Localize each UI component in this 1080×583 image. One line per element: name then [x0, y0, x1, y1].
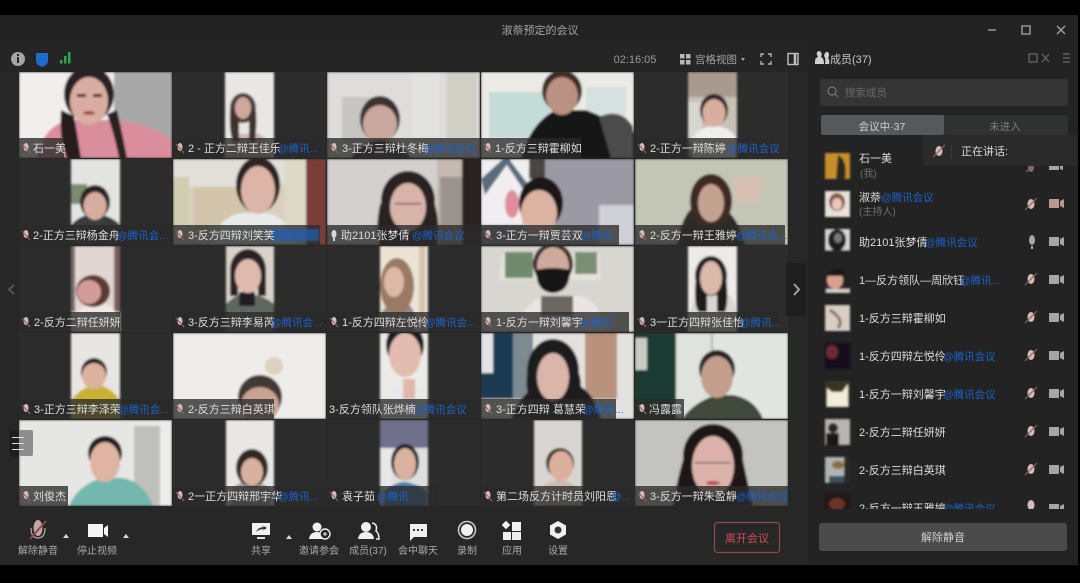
button: members — [349, 522, 387, 557]
button: settings — [548, 521, 568, 557]
video tile: 陈婷 — [638, 72, 780, 158]
video tile: 朱盈靜: @腾讯会议 — [736, 490, 789, 503]
button: unmute — [18, 520, 69, 557]
member row: 淑萘 — [825, 191, 1064, 218]
video tile: 李易芮: 3-反方三辩李易芮 — [188, 315, 275, 329]
icon: full screen — [761, 54, 771, 64]
video tile: 刘俊杰: 刘俊杰 — [33, 489, 66, 503]
video tile: 张佳怡: @腾讯... — [740, 316, 780, 329]
video tile: 袁子茹: 袁子茹 — [342, 489, 375, 503]
button: chat: 会中聊天 — [398, 544, 438, 557]
speaking now popup — [923, 135, 1078, 166]
button: settings: 设置 — [548, 545, 568, 557]
video tile: 王佳乐: @腾讯... — [278, 142, 318, 155]
button: chat — [398, 524, 438, 557]
video tile: 白英琪 — [173, 333, 326, 419]
members header — [815, 51, 1070, 66]
member row: 刘馨宇 — [825, 381, 1064, 407]
icon: info — [11, 52, 25, 66]
video tile: 杜冬梅: 3-正方三辩杜冬梅 — [342, 141, 429, 155]
video tile: 白英琪: 2-反方三辩白英琪 — [188, 402, 275, 416]
video tile: 冯露露: 冯露露 — [649, 403, 682, 416]
video tile: 朱盈靜 — [635, 420, 789, 506]
gallery view switch: 宫格视图 — [695, 53, 737, 66]
button: unmute: 解除静音 — [18, 544, 58, 557]
member row: 周欣钰 — [825, 267, 1064, 293]
unmute button — [819, 523, 1067, 551]
status toolbar — [0, 44, 808, 72]
black top letterbox — [0, 0, 1080, 15]
member row: 刘馨宇: 1-反方一辩刘馨宇 — [859, 387, 946, 401]
button: stop video — [77, 524, 129, 557]
member row: 张梦倩 — [825, 229, 1064, 255]
video tile: 邢宇华 — [176, 420, 318, 506]
video tile: 李泽荣: @腾讯会... — [118, 403, 169, 416]
video tile: 贾芸双: 3-正方一辩贾芸双 — [496, 228, 583, 242]
button: record — [457, 522, 477, 557]
video tile: 石一美 — [19, 72, 172, 158]
member row: 左悦伶 — [825, 343, 1064, 369]
speaking now popup: 正在讲话: — [961, 144, 1008, 158]
black bottom letterbox — [0, 565, 1080, 583]
video tile: 朱盈靜: 3-反方一辩朱盈靜 — [650, 489, 737, 503]
video tile: 任妍妍 — [22, 246, 122, 332]
video tile: 李泽荣: 3-正方三辩李泽荣 — [34, 402, 121, 416]
button: record: 录制 — [457, 544, 477, 557]
video tile: 杜冬梅 — [327, 72, 480, 158]
video tile: 刘俊杰 — [19, 420, 172, 506]
search box — [820, 79, 1068, 106]
search box: 搜索成员 — [845, 86, 887, 99]
video tile: 邢宇华: 2一正方四辩邢宇华 — [188, 489, 282, 503]
video tile: 陈婷: 2-正方一辩陈婷 — [650, 141, 726, 155]
video tile: 王佳乐 — [176, 72, 318, 158]
tab: not joined: 未进入 — [989, 121, 1021, 133]
video tile: 张梦倩: @腾讯会议 — [412, 229, 465, 242]
video tile: 刘笑笑: 3-反方四辩刘笑笑 — [188, 228, 275, 242]
member row: 淑萘: (主持人) — [859, 205, 896, 218]
video tile: 张梦倩 — [327, 159, 465, 245]
member row: 任妍妍 — [825, 419, 1064, 445]
member row: 周欣钰: @腾讯... — [960, 274, 1000, 287]
video tile: 冯露露 — [635, 333, 788, 419]
members header: 成员(37) — [830, 53, 872, 66]
member row: 张梦倩: 助2101张梦倩 — [859, 235, 927, 249]
video tile: 王雅婷: 2-反方一辩王雅婷 — [650, 228, 737, 242]
video tile: 陈婷: @腾讯会议 — [727, 142, 780, 155]
member row: 王雅婷 (clipped): @腾讯会议 — [943, 502, 996, 515]
video tile: 杜冬梅: @腾讯会议 — [423, 142, 476, 155]
video tile: 张烨楠: @腾讯会议 — [414, 403, 467, 416]
tab: in meeting — [821, 115, 944, 135]
next page arrow — [786, 263, 806, 316]
video tile: 刘阳恩: @... — [611, 491, 630, 503]
unmute button: 解除静音 — [921, 530, 965, 544]
video tile: 贾芸双 — [481, 159, 634, 245]
button: members: 成员(37) — [349, 545, 387, 557]
floating list handle — [10, 430, 33, 457]
bottom toolbar — [18, 520, 780, 557]
video tile: 石一美: 石一美 — [33, 142, 66, 155]
video tile: 张佳怡 — [638, 246, 780, 332]
video tile: 李易芮 — [176, 246, 322, 332]
video tile: 左悦伶: 1-反方四辩左悦伶 — [342, 315, 429, 329]
button: share: 共享 — [251, 544, 271, 557]
button: leave meeting — [714, 522, 780, 552]
video tile: 刘馨宇 — [481, 246, 634, 332]
member row: 王雅婷 (clipped) — [824, 493, 1064, 515]
video tile: 刘笑笑 — [173, 159, 326, 245]
video tile: 葛慧荣: 3-正方四辩 葛慧荣 — [496, 402, 586, 416]
member row: 淑萘: @腾讯会议 — [881, 191, 934, 204]
member row: 霍柳如: 1-反方三辩霍柳如 — [859, 311, 946, 325]
video tile: 左悦伶 — [330, 246, 476, 332]
tab: not joined — [944, 115, 1068, 135]
member row: 刘馨宇: @腾讯会议 — [943, 388, 996, 401]
gallery view switch — [680, 53, 745, 66]
member row: 淑萘: 淑萘 — [859, 191, 881, 204]
video tile: 王雅婷 — [635, 159, 788, 245]
video tile: 霍柳如 — [481, 72, 634, 158]
video tile: 刘阳恩 — [484, 420, 630, 506]
video tile: 刘馨宇: @腾讯 — [581, 316, 613, 329]
video tile: 刘阳恩: 第二场反方计时员刘阳恩 — [496, 489, 617, 503]
video tile: 张佳怡: 3一正方四辩张佳怡 — [650, 315, 744, 329]
video tile: 贾芸双: @腾讯 — [581, 229, 613, 242]
members panel — [808, 44, 1078, 565]
member row: 王雅婷 (clipped): 2-反方一辩王雅婷 — [859, 501, 946, 515]
icon: security shield — [36, 53, 48, 67]
member row: 石一美: 石一美 — [859, 152, 892, 165]
meeting timer: 02:16:05 — [614, 54, 656, 66]
button: invite — [299, 522, 339, 557]
video tile: 袁子茹 — [330, 420, 430, 506]
video tile: 杨金舟: 2-正方三辩杨金舟 — [33, 228, 120, 242]
video tile: 王佳乐: 2 - 正方二辩王佳乐 — [188, 141, 281, 155]
member row: 石一美: (我) — [860, 168, 877, 180]
button: leave meeting: 离开会议 — [725, 531, 769, 545]
video tile: 李易芮: @腾讯会... — [271, 316, 322, 329]
meeting title: 淑萘预定的会议 — [502, 23, 578, 37]
video tile: 霍柳如: 1-反方三辩霍柳如 — [495, 141, 582, 155]
member row: 白英琪 — [825, 457, 1064, 483]
member row: 石一美 — [825, 152, 1063, 180]
member row: 左悦伶: 1-反方四辩左悦伶 — [859, 349, 946, 363]
video tile: 王雅婷: @腾讯会... — [736, 229, 787, 242]
video tile: 葛慧荣: @腾讯... — [583, 403, 623, 416]
video tile: 任妍妍: 2-反方二辩任妍妍 — [34, 315, 121, 329]
button: stop video: 停止视频 — [77, 544, 117, 557]
member row: 白英琪: 2-反方三辩白英琪 — [859, 463, 946, 477]
icon: signal — [60, 52, 70, 64]
icon: side panel toggle — [788, 54, 798, 64]
title bar — [0, 15, 1078, 44]
video tile: 李泽荣 — [22, 333, 169, 419]
button: apps: 应用 — [502, 544, 522, 557]
member row: 左悦伶: @腾讯会议 — [943, 350, 996, 363]
member row: 张梦倩: @腾讯会议 — [925, 236, 978, 249]
video tile: 杨金舟: @腾讯会... — [117, 229, 168, 242]
video tile: 刘馨宇: 1-反方一辩刘馨宇 — [496, 315, 583, 329]
tab: in meeting: 会议中·37 — [859, 120, 905, 133]
video tile: 杨金舟 — [22, 159, 168, 242]
video tile: 葛慧荣 — [481, 333, 634, 419]
member row: 霍柳如 — [825, 305, 1064, 331]
member row: 任妍妍: 2-反方二辩任妍妍 — [859, 425, 946, 439]
previous page arrow — [9, 285, 14, 294]
video tile: 张梦倩: 助2101张梦倩 — [341, 228, 409, 242]
video tile: 张烨楠 — [329, 333, 467, 419]
button: apps — [502, 521, 522, 557]
video grid — [19, 66, 789, 506]
window controls — [988, 26, 1065, 34]
button: share — [251, 523, 292, 557]
video tile: 张烨楠: 3-反方领队张烨楠 — [329, 402, 416, 416]
video tile: 袁子茹: @腾讯 — [377, 490, 409, 503]
button: invite: 邀请参会 — [299, 544, 339, 557]
member row: 周欣钰: 1—反方领队—周欣钰 — [859, 273, 964, 287]
video tile: 邢宇华: @腾讯... — [278, 490, 318, 503]
video tile: 左悦伶: @腾讯会... — [425, 316, 476, 329]
